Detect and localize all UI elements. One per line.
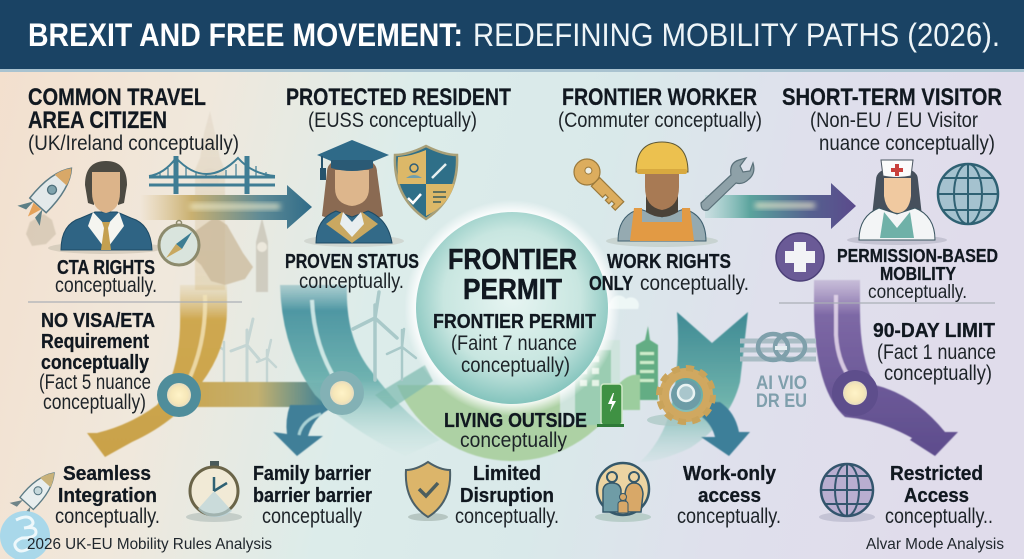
title: BREXIT AND FREE MOVEMENT: [28, 17, 463, 53]
icon: suspension bridge [149, 156, 275, 194]
living outside label: conceptually [460, 429, 567, 452]
faint label: AI VIO DR EU [756, 373, 807, 412]
block: frontier worker: (Commuter conceptually) [558, 109, 762, 132]
bottom item: restricted access [819, 463, 993, 528]
icon: rocket small [10, 464, 64, 520]
block: protected resident: PROTECTED RESIDENT [286, 84, 511, 111]
orb text: conceptually) [461, 354, 570, 377]
block: proven status: conceptually. [299, 270, 404, 293]
block: work rights: conceptually. [640, 272, 749, 295]
bottom item: restricted access: Access [904, 485, 969, 507]
block: 90-day limit: (Fact 1 nuance [877, 341, 996, 364]
block: work rights [589, 251, 749, 295]
block: permission-based mobility: conceptually. [868, 282, 967, 303]
node: gold junction [157, 373, 201, 417]
block: short-term visitor: (Non-EU / EU Visitor [810, 109, 978, 132]
wind turbines [212, 319, 276, 382]
node: purple junction [832, 370, 878, 416]
icon: rocket [17, 158, 83, 227]
bottom item: limited disruption: Limited [473, 463, 541, 485]
wind turbines near the orb [353, 292, 416, 380]
block: work rights: WORK RIGHTS [607, 251, 731, 273]
faint label: AI VIO DR EU: AI VIO [756, 373, 807, 394]
bottom item: restricted access: conceptually.. [885, 505, 993, 528]
bottom item: family barrier: Family barrier [253, 463, 371, 485]
title [28, 17, 1000, 53]
icon: status shield [395, 146, 457, 219]
orb heading: PERMIT [463, 274, 562, 306]
bottom item: seamless integration: conceptually. [55, 505, 160, 528]
green hill under the orb [397, 385, 627, 461]
bottom item: limited disruption: Disruption [460, 485, 554, 507]
flow ribbon: teal path [273, 285, 440, 456]
teal chevron with work arrow [640, 312, 750, 462]
living outside label [444, 410, 587, 452]
block: common travel area citizen: AREA CITIZEN [28, 107, 167, 134]
header bar [0, 0, 1024, 72]
divider lines [28, 302, 995, 303]
block: 90-day limit [873, 320, 996, 385]
block: protected resident [286, 84, 511, 132]
block: 90-day limit: 90-DAY LIMIT [873, 320, 995, 342]
icon: check shield [406, 462, 450, 521]
icon: graduate [304, 140, 404, 247]
block: permission-based mobility: MOBILITY [880, 264, 956, 284]
block: common travel area citizen [28, 84, 239, 155]
block: no visa/eta requirement: conceptually) [43, 391, 146, 414]
orb text: FRONTIER PERMIT [433, 311, 596, 333]
block: no visa/eta requirement: Requirement [41, 331, 149, 353]
icon: worker [606, 142, 718, 247]
block: CTA rights [55, 257, 157, 297]
icon: wrench [701, 158, 754, 210]
icon: key [569, 154, 629, 214]
icon: knot [740, 334, 816, 360]
flow ribbon: gold path [87, 285, 325, 457]
block: no visa/eta requirement [39, 310, 155, 414]
bottom item: family barrier: barrier barrier [253, 485, 372, 507]
block: common travel area citizen: (UK/Ireland conceptually) [28, 132, 239, 155]
living outside label: LIVING OUTSIDE [444, 410, 587, 432]
orb: frontier permit [416, 212, 608, 404]
faint label: AI VIO DR EU: DR EU [756, 391, 807, 412]
bottom item: work-only access: Work-only [683, 463, 777, 485]
bottom item: limited disruption: conceptually. [455, 505, 559, 528]
icon: globe [938, 164, 998, 224]
block: CTA rights: conceptually. [55, 274, 157, 297]
footer source right: Alvar Mode Analysis [866, 536, 1004, 553]
icon: family [595, 463, 651, 522]
watermark badge [0, 511, 50, 559]
bottom item: restricted access: Restricted [890, 463, 983, 485]
orb text [433, 311, 596, 377]
horizontal arrow: frontier worker to visitor [705, 183, 856, 229]
bottom item: work-only access: access [698, 485, 761, 507]
bottom item: work-only access: conceptually. [677, 505, 781, 528]
block: common travel area citizen: COMMON TRAVEL [28, 84, 206, 111]
horizontal arrow: CTA to protected resident [140, 185, 312, 229]
block: proven status: PROVEN STATUS [285, 251, 419, 273]
block: short-term visitor [782, 84, 1002, 155]
block: work rights: ONLY [589, 273, 634, 295]
icon: medical plus badge [776, 233, 824, 281]
block: no visa/eta requirement: conceptually [41, 352, 150, 374]
bottom item: seamless integration: Seamless [63, 463, 151, 485]
icon: purple globe [819, 464, 875, 522]
bottom item: work-only access [595, 463, 781, 528]
glow ring around orb [404, 200, 620, 416]
node: teal junction [320, 371, 364, 415]
icon: compass [159, 220, 199, 265]
icon: EV charger [597, 384, 624, 427]
bottom item: seamless integration [10, 463, 160, 528]
bottom item: seamless integration: Integration [58, 485, 157, 507]
faint landmark backdrop: towers and UK map [26, 111, 268, 292]
bottom item: limited disruption [406, 462, 559, 528]
icon: nurse [847, 160, 947, 245]
block: no visa/eta requirement: (Fact 5 nuance [39, 371, 151, 394]
icon: stopwatch [186, 461, 242, 522]
block: permission-based mobility [837, 246, 998, 303]
city skyline with EV charger [560, 295, 658, 425]
orb text: (Faint 7 nuance [451, 332, 577, 355]
icon: gear [647, 368, 713, 426]
bottom item: family barrier: conceptually [262, 505, 362, 528]
block: protected resident: (EUSS conceptually) [308, 109, 477, 132]
block: 90-day limit: conceptually) [884, 362, 992, 385]
block: proven status [285, 251, 419, 293]
block: no visa/eta requirement: NO VISA/ETA [41, 310, 155, 332]
bottom item: family barrier [186, 461, 372, 528]
block: frontier worker [558, 84, 762, 132]
footer source left: 2026 UK-EU Mobility Rules Analysis [27, 536, 272, 553]
orb heading [448, 244, 577, 306]
orb heading: FRONTIER [448, 244, 577, 276]
flow ribbon: purple path [814, 280, 958, 456]
block: short-term visitor: nuance conceptually) [819, 132, 995, 155]
block: frontier worker: FRONTIER WORKER [562, 84, 757, 111]
block: CTA rights: CTA RIGHTS [57, 257, 155, 279]
icon: citizen figure [48, 161, 164, 254]
block: permission-based mobility: PERMISSION-BASED [837, 246, 998, 266]
